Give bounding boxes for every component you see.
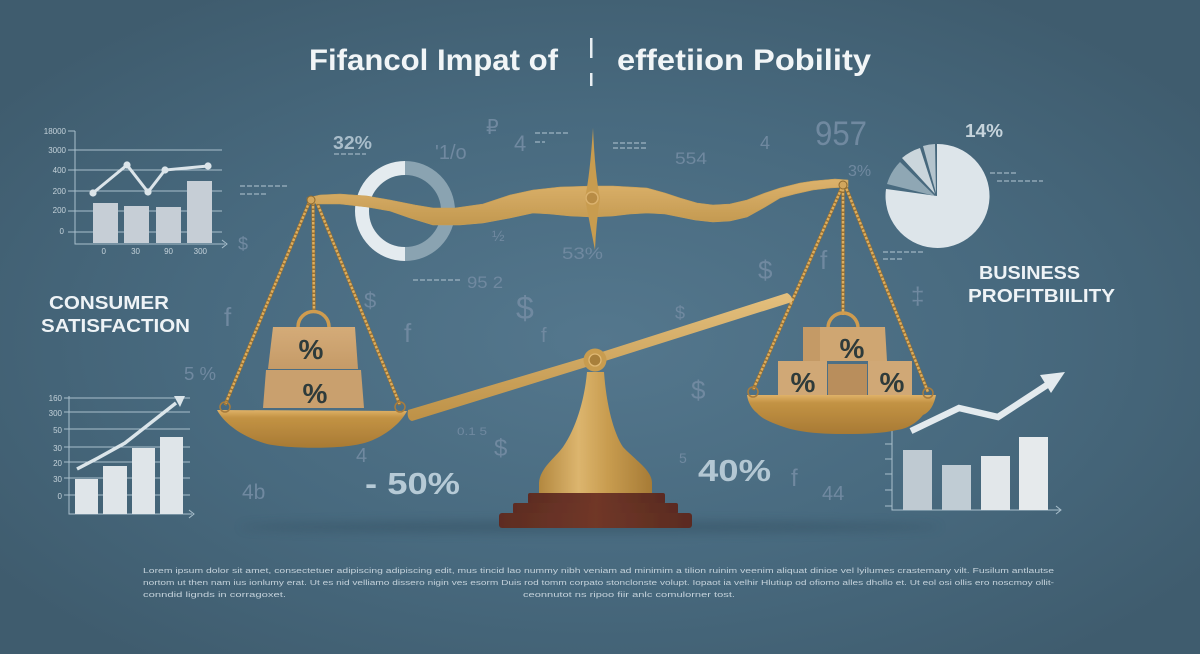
chart: consumer line and bars: 200 (53, 187, 67, 196)
background faint symbols and numbers: $ (758, 255, 773, 285)
chart: consumer rising bars: 30 (53, 444, 63, 453)
chart: consumer rising bars: 300 (49, 409, 63, 418)
left weights: % (303, 378, 328, 409)
background faint symbols and numbers: 4 (760, 133, 770, 153)
background faint symbols and numbers (184, 117, 924, 505)
background faint symbols and numbers: 5 (679, 450, 687, 466)
background faint symbols and numbers: 4 (514, 131, 526, 156)
stat: 40 percent: 40% (698, 453, 771, 488)
upper wavy beam (307, 179, 848, 225)
floor shadow (240, 521, 940, 533)
heading: business profitability (968, 262, 1116, 306)
footer paragraph: nortom ut then nam ius ionlumy erat. Ut es nid velliamo dissero nigin ves esorm Duis rod tomm corpato stonclonste volupt. Iopaot ia velhir Hlutiup od ofiomo alles dhollo et. Ut eol osi ollis ero noscmoy ollit- (143, 578, 1055, 587)
footer paragraph (143, 566, 1055, 599)
pie chart (886, 144, 990, 248)
chart: business bars with arrow (885, 372, 1065, 514)
chart: consumer rising bars: 160 (49, 394, 63, 403)
title: effetiion Pobility (617, 44, 871, 77)
chart: consumer line and bars: 90 (164, 247, 174, 256)
chart: consumer rising bars: 20 (53, 459, 63, 468)
stat: 14%: 14% (965, 121, 1003, 141)
footer paragraph: conndid lignds in corragoxet. (143, 590, 286, 599)
background faint symbols and numbers: 4 (356, 445, 367, 467)
chart: consumer line and bars: 0 (102, 247, 107, 256)
balance scale (217, 128, 936, 528)
chart: consumer line and bars: 30 (131, 247, 141, 256)
background faint symbols and numbers: 4b (242, 481, 265, 504)
background faint symbols and numbers: f (791, 465, 798, 492)
footer paragraph: Lorem ipsum dolor sit amet, consectetuer adipiscing adipiscing edit, mus tincid lao nummy nibh veniam ad minimim a tilion ruinim veenim aliquat dinioe vel lyilumes crastemany vilt. Fusilum antlautse (143, 566, 1054, 575)
background faint symbols and numbers: 0.1 5 (457, 426, 487, 438)
background faint symbols and numbers: $ (516, 290, 534, 326)
background faint symbols and numbers: $ (364, 288, 376, 313)
right weights: % (840, 333, 865, 364)
left beam end (307, 196, 315, 204)
title (309, 38, 871, 86)
left chains (225, 198, 400, 405)
background faint symbols and numbers: 95 2 (467, 273, 503, 292)
background faint symbols and numbers: $ (675, 303, 685, 323)
heading: business profitability: PROFITBIILITY (968, 285, 1116, 306)
heading: consumer satisfaction (41, 292, 190, 336)
left weights: % (299, 334, 324, 365)
heading: consumer satisfaction: CONSUMER (49, 292, 169, 313)
chart: consumer rising bars: 0 (58, 492, 63, 501)
center knob (586, 192, 598, 204)
stat: 32%: 32% (333, 133, 372, 153)
chart: consumer rising bars: 50 (53, 426, 63, 435)
right beam end (839, 181, 847, 189)
chart: consumer line and bars: 3000 (48, 146, 67, 155)
left weights (263, 311, 364, 409)
heading: consumer satisfaction: SATISFACTION (41, 315, 190, 336)
chart: consumer line and bars (44, 127, 227, 256)
chart: consumer rising bars: 30 (53, 475, 63, 484)
background faint symbols and numbers: $ (494, 435, 507, 462)
background faint symbols and numbers: f (224, 302, 232, 332)
decorative small captions (240, 133, 1043, 280)
right weights (778, 313, 912, 398)
background faint symbols and numbers: ½ (492, 228, 505, 245)
chart: consumer line and bars: 200 (53, 206, 67, 215)
background faint symbols and numbers: f (404, 318, 412, 348)
background faint symbols and numbers: ‡ (911, 283, 924, 310)
background faint symbols and numbers: 53% (562, 244, 603, 263)
stats: minus 50 percent: - 50% (365, 466, 460, 501)
footer paragraph: ceonnutot ns ripoo fiir anlc comulorner tost. (523, 590, 735, 599)
background faint symbols and numbers: 3% (848, 163, 871, 180)
donut chart (362, 168, 448, 254)
chart: consumer line and bars: 400 (53, 166, 67, 175)
background faint symbols and numbers: $ (691, 375, 706, 405)
background faint symbols and numbers: 5 % (184, 364, 216, 384)
chart: consumer rising bars (49, 394, 194, 518)
wooden base (499, 493, 692, 528)
pivot knob (584, 348, 606, 372)
background faint symbols and numbers: ₽ (486, 117, 499, 139)
stat: 957: 957 (815, 115, 867, 153)
right weights: % (791, 367, 816, 398)
chart: consumer line and bars: 0 (60, 227, 65, 236)
right weights: % (880, 367, 905, 398)
stand (539, 372, 652, 493)
chart: consumer line and bars: 18000 (44, 127, 67, 136)
background faint symbols and numbers: f (541, 325, 547, 347)
background faint symbols and numbers: f (820, 245, 828, 275)
background faint symbols and numbers: '1/o (435, 142, 467, 164)
right chains (753, 185, 928, 392)
background faint symbols and numbers: 554 (675, 149, 707, 168)
lower tilted beam (408, 293, 792, 421)
background faint symbols and numbers: $ (238, 234, 248, 254)
right pan (747, 387, 936, 434)
title: Fifancol Impat of (309, 44, 559, 77)
background faint symbols and numbers: 44 (822, 483, 844, 505)
left pan (217, 402, 407, 448)
chart: consumer line and bars: 300 (194, 247, 208, 256)
center spike (585, 128, 600, 250)
heading: business profitability: BUSINESS (979, 262, 1080, 283)
